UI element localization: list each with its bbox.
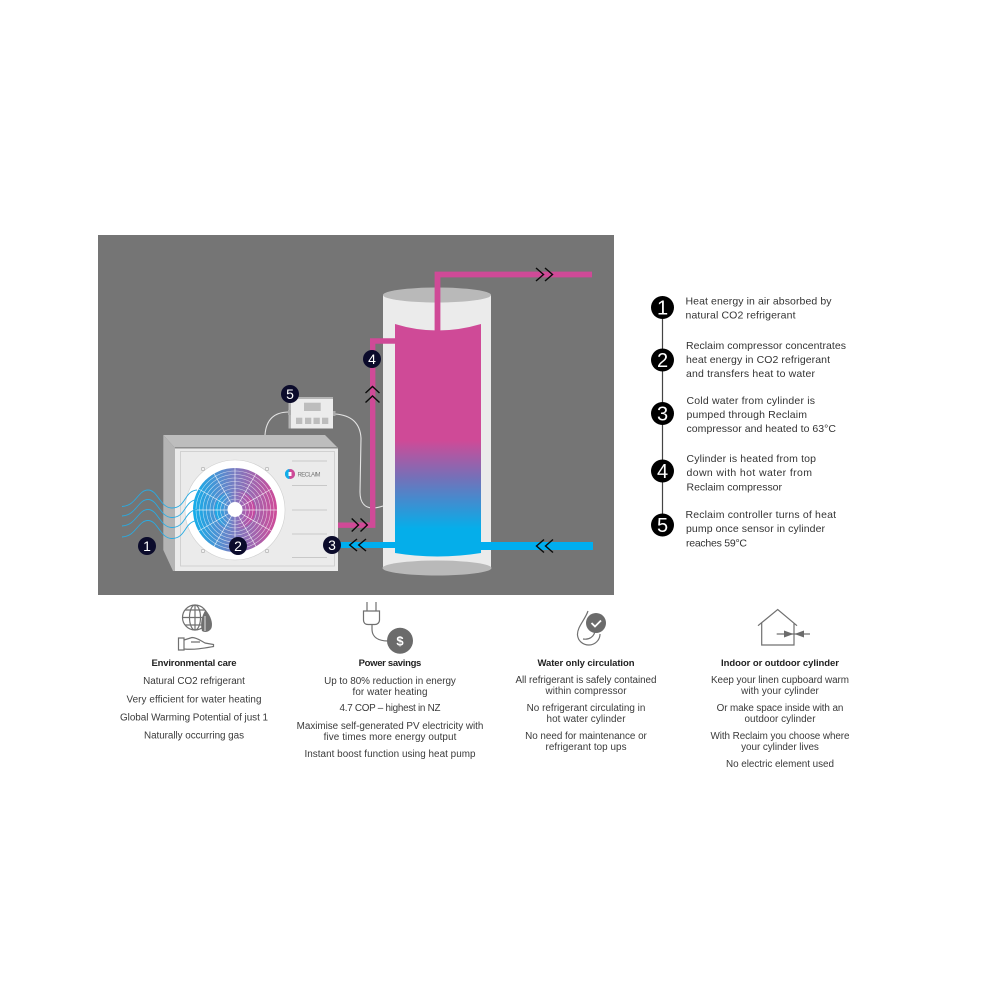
bullet text: five times more energy output xyxy=(324,732,457,743)
badge 1: 1 xyxy=(143,538,151,554)
step 4: down with hot water from xyxy=(686,467,812,479)
bullet text: within compressor xyxy=(544,686,627,697)
column: power savings xyxy=(297,602,483,760)
step 2: heat energy in CO2 refrigerant xyxy=(686,354,830,366)
step 4: Cylinder is heated from top xyxy=(686,453,816,465)
bullet text: All refrigerant is safely contained xyxy=(516,675,656,686)
hot pipe: outlet from cylinder xyxy=(438,274,592,331)
bullet text: your cylinder lives xyxy=(741,742,819,753)
panel: system diagram xyxy=(98,235,614,595)
hot pipe: heat pump to cylinder xyxy=(338,341,395,525)
step 1: natural CO2 refrigerant xyxy=(686,310,796,322)
badge 2 xyxy=(229,537,247,555)
badge 5 xyxy=(281,385,299,403)
step 1: 1 xyxy=(657,298,668,320)
flow arrows: riser xyxy=(366,386,380,402)
logo: Reclaim xyxy=(285,469,320,479)
step 4: Reclaim compressor xyxy=(686,482,782,494)
bullet text: Very efficient for water heating xyxy=(126,694,262,706)
heading: Environmental care xyxy=(152,658,236,669)
bullet text: No need for maintenance or xyxy=(525,731,648,742)
step 5: Reclaim controller turns of heat xyxy=(686,509,836,521)
badge 3 xyxy=(323,536,341,554)
step 1 xyxy=(651,296,832,322)
bullet text: Global Warming Potential of just 1 xyxy=(120,712,268,724)
step 3: Cold water from cylinder is xyxy=(686,395,815,407)
step 4 xyxy=(651,453,816,494)
bullet text: Maximise self-generated PV electricity with xyxy=(297,721,483,732)
step 3 xyxy=(651,395,836,435)
heading: Indoor or outdoor cylinder xyxy=(721,658,839,669)
heat pump unit xyxy=(163,435,338,571)
column: environmental care xyxy=(120,605,268,742)
bullet text xyxy=(516,675,656,753)
icon: globe and hand xyxy=(178,605,214,650)
icon: water drop with check xyxy=(577,611,606,645)
controller xyxy=(288,397,336,428)
flow arrows: heat pump outlet xyxy=(352,518,367,532)
step 2: Reclaim compressor concentrates xyxy=(686,340,846,352)
step 3: compressor and heated to 63°C xyxy=(686,423,836,435)
bullet text xyxy=(297,676,483,760)
step 4: 4 xyxy=(657,461,668,483)
bullet text xyxy=(710,675,850,770)
bullet text: with your cylinder xyxy=(740,686,820,697)
bullet text: Up to 80% reduction in energy xyxy=(324,676,456,687)
badge 3: 3 xyxy=(328,537,336,553)
flow arrows: hot outlet xyxy=(536,268,552,281)
bullet text: outdoor cylinder xyxy=(744,714,816,725)
step 5 xyxy=(651,509,836,550)
cold pipe: cylinder to heat pump xyxy=(338,542,395,548)
hot water cylinder xyxy=(382,288,492,576)
bullet text: 4.7 COP – highest in NZ xyxy=(340,703,440,714)
icon: plug and dollar xyxy=(364,602,413,654)
bullet text: Or make space inside with an xyxy=(717,703,843,714)
step 2: and transfers heat to water xyxy=(686,368,816,380)
bullet text xyxy=(120,676,268,742)
bullet text: With Reclaim you choose where xyxy=(710,731,850,742)
controller cables xyxy=(265,412,383,508)
step 3: 3 xyxy=(657,404,668,426)
icon: plug and dollar: $ xyxy=(396,634,404,648)
bullet text: Natural CO2 refrigerant xyxy=(143,676,245,687)
bullet text: No refrigerant circulating in xyxy=(527,703,645,714)
step 1: Heat energy in air absorbed by xyxy=(686,296,832,308)
flow arrows: heat pump inlet xyxy=(350,539,366,551)
heading: Power savings xyxy=(359,658,421,669)
fan xyxy=(185,460,285,560)
step 5: 5 xyxy=(657,515,668,537)
legend: numbered process steps xyxy=(651,296,846,550)
bullet text: for water heating xyxy=(352,687,428,698)
badge 1 xyxy=(138,537,156,555)
step 5: pump once sensor in cylinder xyxy=(686,523,826,535)
badge 4 xyxy=(363,350,381,368)
air flow lines xyxy=(122,490,197,538)
vent lines xyxy=(292,461,327,558)
bullet text: Keep your linen cupboard warm xyxy=(711,675,849,686)
heading: Water only circulation xyxy=(538,658,635,669)
icon: house with arrows xyxy=(758,610,810,645)
bullet text: refrigerant top ups xyxy=(546,742,627,753)
badge 4: 4 xyxy=(368,351,376,367)
logo: Reclaim: RECLAIM xyxy=(298,472,320,478)
cold pipe: inlet to cylinder xyxy=(481,542,593,550)
flow arrows: cold inlet xyxy=(536,540,553,552)
step 2: 2 xyxy=(657,350,668,372)
bullet text: No electric element used xyxy=(726,759,834,770)
step 3: pumped through Reclaim xyxy=(686,409,807,421)
column: water only circulation xyxy=(516,611,656,753)
step 5: reaches 59°C xyxy=(686,538,747,550)
badge 5: 5 xyxy=(286,386,294,402)
column: indoor or outdoor cylinder xyxy=(710,610,850,770)
bullet text: Naturally occurring gas xyxy=(144,730,244,742)
badge 2: 2 xyxy=(234,538,242,554)
bullet text: hot water cylinder xyxy=(546,714,626,725)
bullet text: Instant boost function using heat pump xyxy=(304,749,476,760)
step 2 xyxy=(651,340,846,380)
